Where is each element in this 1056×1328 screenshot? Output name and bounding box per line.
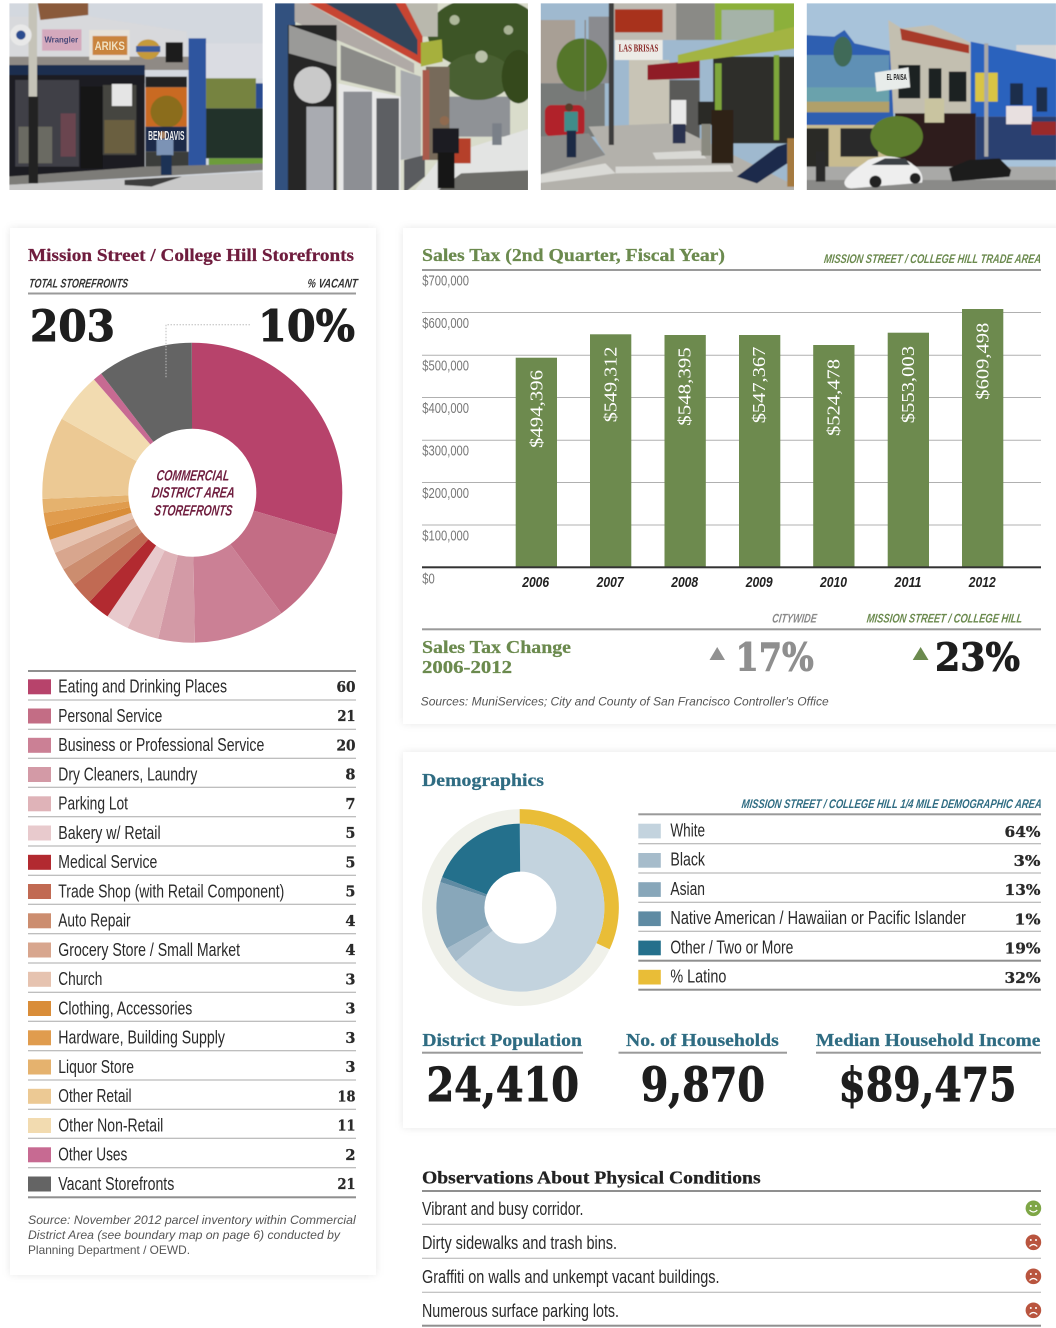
bar chart: sales tax by year: $700,000 (422, 274, 469, 290)
source note (28, 1213, 356, 1257)
legend table: demographics: Other / Two or More (670, 937, 793, 957)
stat: number of households (618, 1030, 787, 1113)
legend table: storefront categories: 4 (345, 942, 356, 959)
panel: observations (422, 1168, 1041, 1327)
legend table: demographics: 19% (1004, 941, 1041, 958)
photo: storefront with Wrangler and Ben Davis signs (7, 0, 266, 193)
bar chart: sales tax by year: $548,395 (675, 347, 695, 426)
heading: demographics: Demographics (422, 770, 544, 790)
source note: Planning Department / OEWD. (28, 1243, 190, 1257)
legend table: demographics: Black (670, 850, 706, 870)
legend table: storefront categories: Vacant Storefronts (58, 1174, 174, 1194)
legend table: storefront categories: Liquor Store (58, 1057, 134, 1077)
stat: median household income: $89,475 (838, 1058, 1016, 1113)
stat: number of households: 9,870 (641, 1058, 765, 1113)
legend table: storefront categories: Other Retail (58, 1086, 132, 1106)
legend table: storefront categories: Auto Repair (58, 911, 131, 931)
observation: graffiti: Graffiti on walls and unkempt vacant buildings. (422, 1267, 720, 1287)
stat: citywide 17% increase: 17% (736, 635, 814, 680)
source note: Sources: MuniServices; City and County of San Francisco Controller's Office (421, 695, 829, 709)
bar chart: sales tax by year: 2010 (819, 575, 847, 591)
legend table: demographics: Asian (670, 879, 705, 899)
legend table: demographics (638, 813, 1041, 991)
bar chart: sales tax by year: $524,478 (823, 359, 843, 436)
donut centre label: DISTRICT AREA (151, 485, 236, 502)
observation: vibrant corridor (422, 1199, 1041, 1219)
legend table: storefront categories: 5 (345, 825, 356, 842)
legend table: storefront categories: 18 (338, 1088, 356, 1106)
legend table: storefront categories: Business or Professional Service (58, 735, 264, 755)
bar chart: sales tax by year: $100,000 (422, 528, 469, 544)
stat: median household income: Median Household Income (816, 1030, 1041, 1050)
photo: blue mural buildings with white beetle car: EL PAISA (887, 73, 907, 82)
bar chart: sales tax by year: 2012 (968, 575, 996, 591)
bar chart: sales tax by year: $553,003 (898, 346, 918, 423)
bar chart: sales tax by year: 2009 (745, 575, 773, 591)
legend table: demographics: White (670, 821, 705, 841)
legend table: storefront categories: 60 (336, 679, 356, 696)
bar chart: sales tax by year: $300,000 (422, 444, 469, 460)
legend table: storefront categories: Church (58, 969, 102, 989)
bar chart: sales tax by year: $500,000 (422, 358, 469, 374)
heading: sales tax: Sales Tax (2nd Quarter, Fiscal Year) (422, 245, 725, 265)
bar chart: sales tax by year: $549,312 (601, 347, 621, 422)
source note: District Area (see boundary map on page 6) conducted by (28, 1228, 341, 1242)
bar chart: sales tax by year: 2011 (894, 575, 922, 591)
legend table: storefront categories: 3 (345, 972, 356, 988)
heading: sales tax change: 2006-2012 (422, 657, 512, 677)
legend table: storefront categories: Dry Cleaners, Laundry (58, 764, 197, 784)
heading: sales tax change (422, 637, 571, 677)
legend table: storefront categories: 7 (345, 796, 356, 813)
donut chart: storefront types (85, 386, 299, 600)
photo: storefront with Wrangler and Ben Davis signs: ARIKS (95, 39, 125, 53)
legend table: demographics: 1% (1014, 911, 1041, 928)
heading: observations: Observations About Physical Conditions (422, 1168, 761, 1188)
legend table: storefront categories: 3 (345, 1030, 356, 1047)
heading: storefronts title: Mission Street / College Hill Storefronts (28, 245, 354, 265)
bar chart: sales tax by year: $547,367 (749, 347, 769, 423)
bar chart: sales tax by year (422, 269, 1041, 591)
legend table: storefront categories: 5 (345, 884, 356, 901)
bar chart: sales tax by year: 2006 (521, 575, 550, 591)
observation: vibrant corridor: Vibrant and busy corridor. (422, 1199, 584, 1219)
legend table: storefront categories: 21 (338, 708, 356, 725)
donut centre label (151, 468, 236, 520)
legend table: storefront categories: Eating and Drinking Places (58, 677, 227, 697)
legend table: demographics: 13% (1004, 882, 1041, 899)
bar chart: sales tax by year: $200,000 (422, 486, 469, 502)
legend table: storefront categories: Clothing, Accessories (58, 998, 192, 1018)
legend table: storefront categories: Parking Lot (58, 794, 128, 814)
label: citywide: CITYWIDE (771, 611, 818, 625)
stat: district population (422, 1030, 583, 1113)
bar chart: sales tax by year: $0 (422, 572, 435, 588)
panel: sales tax (403, 228, 1056, 724)
donut centre label: COMMERCIAL (155, 468, 231, 485)
stat: 203 total storefronts: 203 (30, 302, 115, 352)
legend table: storefront categories: Other Non-Retail (58, 1115, 163, 1135)
callout: dotted leader from 10% to vacant slice (166, 325, 250, 377)
legend table: storefront categories: 3 (345, 1001, 356, 1018)
observation: dirty sidewalks: Dirty sidewalks and trash bins. (422, 1233, 617, 1253)
stat: district population: District Population (422, 1030, 582, 1050)
photo: blue mural buildings with white beetle car (804, 0, 1056, 193)
legend table: storefront categories: 21 (338, 1176, 356, 1193)
legend table: storefront categories: 11 (338, 1118, 356, 1135)
legend table: demographics: 3% (1014, 853, 1041, 870)
bar chart: sales tax by year: $494,396 (526, 370, 546, 448)
stat: mission street 23% increase: 23% (935, 635, 1020, 680)
photo: Secession art storefront and street tree (273, 0, 542, 193)
legend table: demographics: 64% (1004, 824, 1041, 841)
panel: storefronts (10, 228, 376, 1275)
bar chart: sales tax by year: 2008 (670, 575, 699, 591)
stat: 10% vacant: 10% (258, 302, 355, 352)
legend table: storefront categories: 3 (345, 1059, 356, 1076)
bar chart: sales tax by year: 2007 (596, 575, 624, 591)
heading: sales tax change: Sales Tax Change (422, 637, 571, 657)
stat: citywide 17% increase (710, 635, 814, 680)
legend table: storefront categories: Grocery Store / Small Market (58, 940, 240, 960)
legend table: storefront categories: 20 (336, 738, 356, 754)
observation: parking lots (422, 1301, 1041, 1321)
legend table: storefront categories: Other Uses (58, 1145, 127, 1165)
observation: graffiti (422, 1267, 1041, 1287)
donut chart: race and latino share (429, 816, 612, 999)
stat: median household income (816, 1030, 1041, 1113)
donut centre label: STOREFRONTS (153, 503, 233, 520)
photo: storefront with Wrangler and Ben Davis signs: BEN DAVIS (148, 128, 185, 143)
legend table: storefront categories: 8 (345, 767, 356, 784)
bar chart: sales tax by year: $600,000 (422, 316, 469, 332)
legend table: storefront categories: Trade Shop (with Retail Component) (58, 881, 284, 901)
legend table: demographics: % Latino (670, 967, 726, 987)
legend table: demographics: 32% (1004, 970, 1041, 987)
legend table: storefront categories: 2 (345, 1147, 356, 1164)
legend table: storefront categories (28, 670, 356, 1198)
observation: dirty sidewalks (422, 1233, 1041, 1253)
legend table: storefront categories: Personal Service (58, 706, 162, 726)
stat: district population: 24,410 (426, 1058, 579, 1113)
legend table: demographics: Native American / Hawaiian or Pacific Islander (670, 908, 966, 928)
photo: Las Brisas street scene with pedestrians (538, 0, 797, 193)
label: percent vacant: % VACANT (307, 276, 359, 290)
legend table: storefront categories: 4 (345, 913, 356, 930)
bar chart: sales tax by year: $609,498 (972, 323, 992, 400)
observation: parking lots: Numerous surface parking lots. (422, 1301, 619, 1321)
label: total storefronts: TOTAL STOREFRONTS (28, 276, 129, 290)
source note: Source: November 2012 parcel inventory within Commercial (28, 1213, 356, 1227)
bar chart: sales tax by year: $400,000 (422, 401, 469, 417)
photo: Las Brisas street scene with pedestrians: LAS BRISAS (619, 44, 659, 55)
panel: demographics (403, 752, 1056, 1128)
legend table: storefront categories: Bakery w/ Retail (58, 823, 161, 843)
photo: storefront with Wrangler and Ben Davis signs: Wrangler (44, 35, 79, 45)
legend table: storefront categories: Hardware, Building Supply (58, 1028, 225, 1048)
legend table: storefront categories: 5 (345, 854, 356, 872)
stat: number of households: No. of Households (626, 1030, 779, 1050)
legend table: storefront categories: Medical Service (58, 852, 157, 872)
